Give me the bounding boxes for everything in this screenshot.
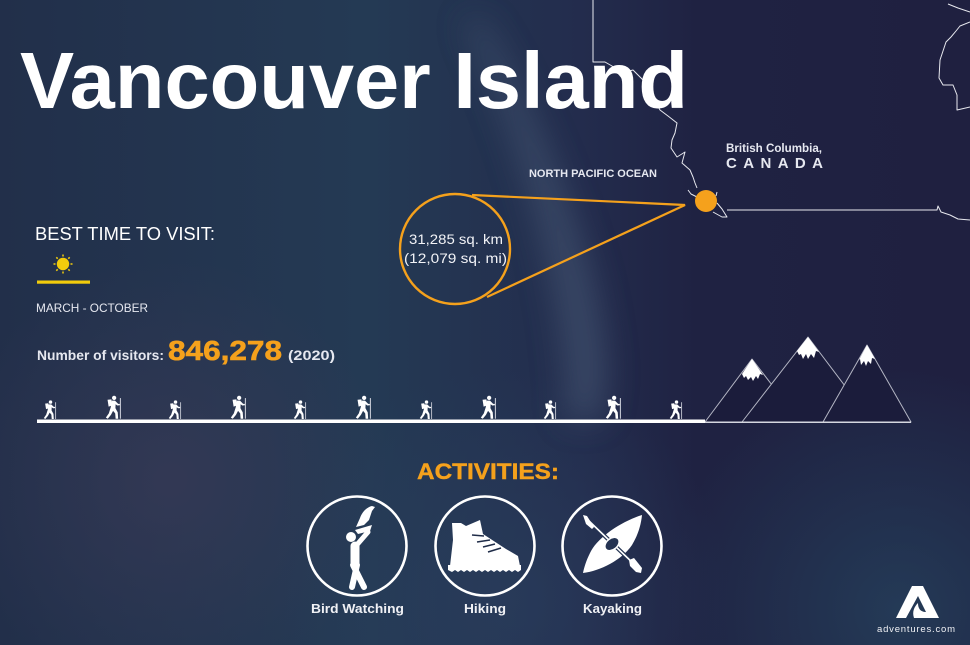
logo: adventures.com: adventures.com — [877, 624, 955, 635]
label: kayaking: Kayaking — [583, 602, 642, 616]
activities heading: ACTIVITIES: — [417, 459, 559, 484]
map outline: Canada and USA borders — [593, 0, 970, 220]
icon: sun — [54, 254, 72, 274]
callout: island area: 31,285 sq. km — [409, 232, 503, 247]
visitor count: (2020) — [288, 347, 335, 363]
trail ground line — [37, 420, 911, 423]
visitor count: Number of visitors: — [37, 347, 164, 363]
activity: kayaking — [562, 496, 662, 616]
icon: hiking boot — [448, 520, 521, 572]
mountain snow caps — [742, 337, 875, 381]
mountains — [705, 337, 911, 422]
map label: British Columbia, Canada: British Columbia, — [726, 143, 822, 155]
visitor count — [37, 335, 335, 366]
activity: hiking — [436, 496, 534, 616]
map label: British Columbia, Canada: CANADA — [726, 155, 823, 172]
logo: adventures.com — [877, 586, 955, 635]
sun season bar — [37, 280, 90, 284]
map label: British Columbia, Canada — [726, 143, 823, 172]
icon: bird on raised hands — [346, 506, 375, 587]
title: Vancouver Island — [20, 36, 688, 125]
label: hiking: Hiking — [464, 602, 506, 616]
label: bird watching: Bird Watching — [311, 602, 404, 616]
callout: island area — [400, 190, 717, 304]
hikers trail — [44, 396, 682, 419]
best time to visit heading: BEST TIME TO VISIT: — [35, 224, 215, 244]
months text: MARCH - OCTOBER — [36, 301, 148, 315]
activity: bird watching — [308, 496, 406, 616]
visitor count: 846,278 — [168, 335, 282, 366]
callout: island area: (12,079 sq. mi) — [404, 251, 507, 266]
map label: North Pacific Ocean: NORTH PACIFIC OCEAN — [529, 168, 657, 180]
icon: kayak and paddle — [583, 515, 642, 573]
